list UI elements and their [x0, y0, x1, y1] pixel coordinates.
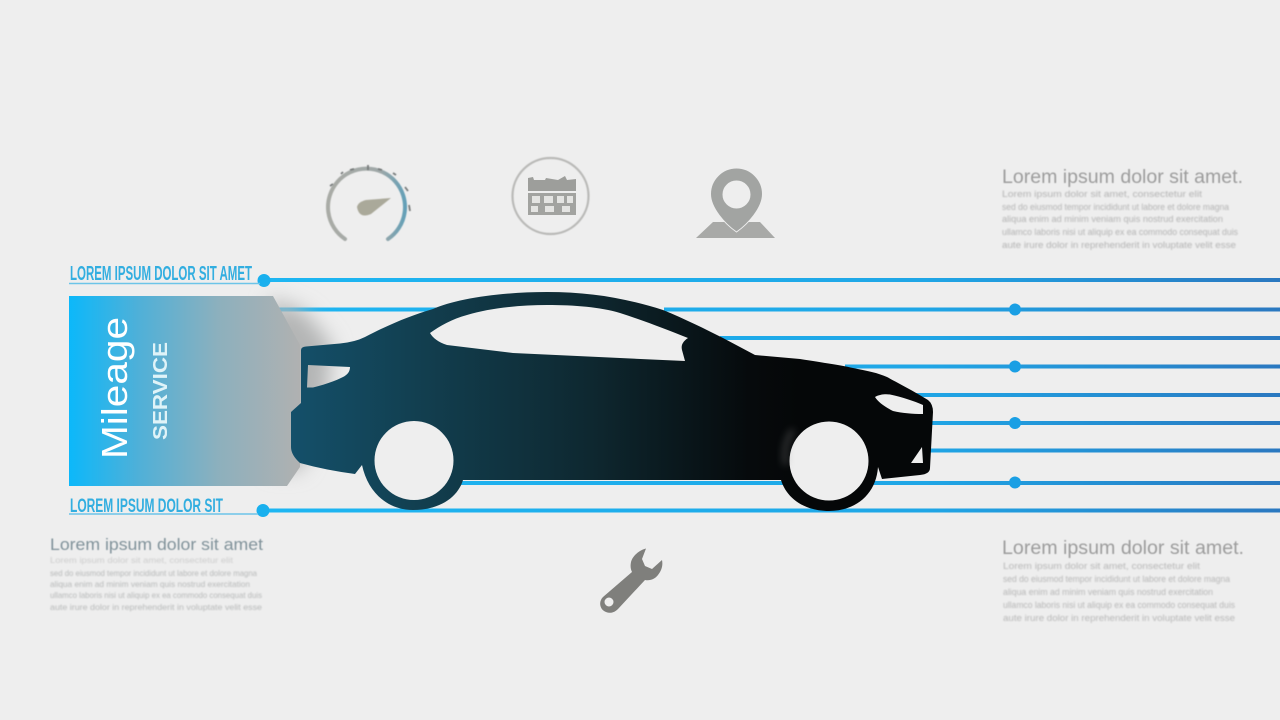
speed lines	[264, 280, 1280, 510]
text block: bottom right	[1002, 538, 1244, 623]
icon: wrench	[600, 548, 662, 613]
body copy: ullamco laboris nisi ut aliquip ex ea commodo consequat duis	[1003, 600, 1235, 610]
body copy: sed do eiusmod tempor incididunt ut labore et dolore magna	[1003, 574, 1230, 584]
body copy	[1003, 561, 1235, 623]
wheel highlight	[785, 430, 793, 465]
line end dots	[256, 274, 1021, 517]
bottom blue label: LOREM IPSUM DOLOR SIT	[70, 496, 223, 517]
icon: speedometer	[328, 165, 410, 239]
text block: top right	[1002, 167, 1243, 250]
icon: calendar	[512, 158, 588, 234]
panel subtitle: SERVICE	[150, 342, 172, 440]
body copy: ullamco laboris nisi ut aliquip ex ea commodo consequat duis	[1002, 227, 1238, 237]
body copy: Lorem ipsum dolor sit amet, consectetur elit	[1003, 561, 1201, 571]
rear wheel	[374, 421, 454, 500]
grey haze behind car	[270, 298, 332, 470]
top blue label: LOREM IPSUM DOLOR SIT AMET	[70, 263, 252, 285]
body copy: Lorem ipsum dolor sit amet, consectetur elit	[50, 555, 234, 565]
body copy	[50, 555, 262, 612]
body copy: ullamco laboris nisi ut aliquip ex ea commodo consequat duis	[50, 590, 262, 600]
body copy: Lorem ipsum dolor sit amet, consectetur elit	[1002, 189, 1203, 199]
body copy	[1002, 189, 1238, 250]
body copy: aliqua enim ad minim veniam quis nostrud exercitation	[1002, 214, 1223, 224]
heading: Lorem ipsum dolor sit amet	[50, 535, 263, 554]
front wheel	[790, 422, 868, 500]
panel title: Mileage: Mileage	[94, 317, 135, 459]
body copy: sed do eiusmod tempor incididunt ut labore et dolore magna	[1002, 202, 1229, 212]
mileage panel	[69, 296, 300, 486]
body copy: aute irure dolor in reprehenderit in voluptate velit esse	[50, 602, 262, 612]
icon: map pin	[696, 168, 775, 238]
car body	[291, 292, 933, 511]
text block: bottom left	[50, 535, 263, 612]
body copy: aute irure dolor in reprehenderit in voluptate velit esse	[1003, 613, 1235, 623]
car silhouette	[291, 292, 933, 511]
heading: Lorem ipsum dolor sit amet.	[1002, 167, 1243, 188]
heading: Lorem ipsum dolor sit amet.	[1002, 538, 1244, 559]
body copy: aute irure dolor in reprehenderit in voluptate velit esse	[1002, 240, 1236, 250]
body copy: aliqua enim ad minim veniam quis nostrud exercitation	[1003, 587, 1213, 597]
body copy: aliqua enim ad minim veniam quis nostrud exercitation	[50, 579, 250, 589]
body copy: sed do eiusmod tempor incididunt ut labore et dolore magna	[50, 568, 257, 578]
